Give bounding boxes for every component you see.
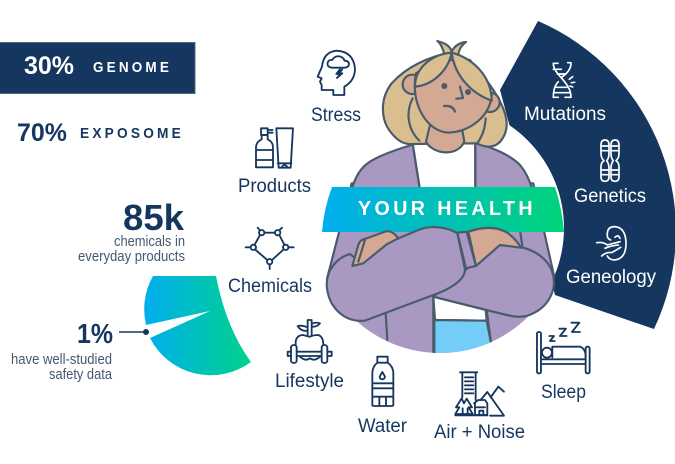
label: Water: Water — [358, 416, 408, 437]
label: Air + Noise: Air + Noise — [434, 422, 525, 443]
stat: 1% safety data: 1% — [77, 318, 113, 349]
icon: embryo — [597, 227, 626, 260]
stat: 70% exposome — [17, 119, 184, 147]
stat: 85k chemicals — [78, 197, 185, 265]
stat: 1% safety data — [11, 318, 149, 383]
panel: genetic factors sector — [316, 21, 675, 352]
banner: your health — [322, 187, 564, 232]
crossed arms — [327, 227, 554, 321]
label: Sleep: Sleep — [541, 382, 586, 403]
stat: 85k chemicals: everyday products — [78, 249, 185, 265]
illustration: woman with crossed arms — [322, 41, 564, 380]
icon: chromosome — [601, 140, 619, 181]
box: 30% genome: GENOME — [93, 59, 172, 76]
label: Geneology: Geneology — [566, 267, 656, 288]
jacket, hair and head — [352, 41, 532, 190]
torso lower — [326, 182, 556, 353]
label: Lifestyle: Lifestyle — [275, 371, 344, 392]
stat: 1% safety data: have well-studied — [11, 352, 112, 368]
label: Chemicals: Chemicals — [228, 276, 312, 297]
stat: 1% safety data: safety data — [49, 367, 113, 383]
icon: stress head — [318, 51, 355, 95]
icon: sleep bed — [537, 323, 590, 373]
icon: chemicals molecule — [246, 228, 294, 269]
icon: products — [256, 128, 293, 168]
icon: air and noise city — [455, 372, 504, 416]
stat: 85k chemicals: chemicals in — [114, 234, 185, 250]
chart: 1% wedge pie — [144, 276, 251, 375]
icon: DNA mutations — [553, 63, 575, 97]
label: Genetics: Genetics — [574, 186, 646, 207]
box: 30% genome: 30% — [24, 52, 74, 80]
label: Stress: Stress — [311, 105, 361, 126]
label: Products: Products — [238, 176, 311, 197]
icon: lifestyle apple and dumbbell — [288, 320, 332, 363]
stat: 70% exposome: EXPOSOME — [80, 125, 184, 142]
box: 30% genome — [0, 42, 195, 94]
banner title: YOUR HEALTH — [358, 198, 536, 220]
stat: 85k chemicals: 85k — [123, 197, 185, 238]
label: Mutations: Mutations — [524, 104, 606, 125]
stat: 70% exposome: 70% — [17, 119, 67, 147]
icon: water bottle — [372, 357, 393, 406]
